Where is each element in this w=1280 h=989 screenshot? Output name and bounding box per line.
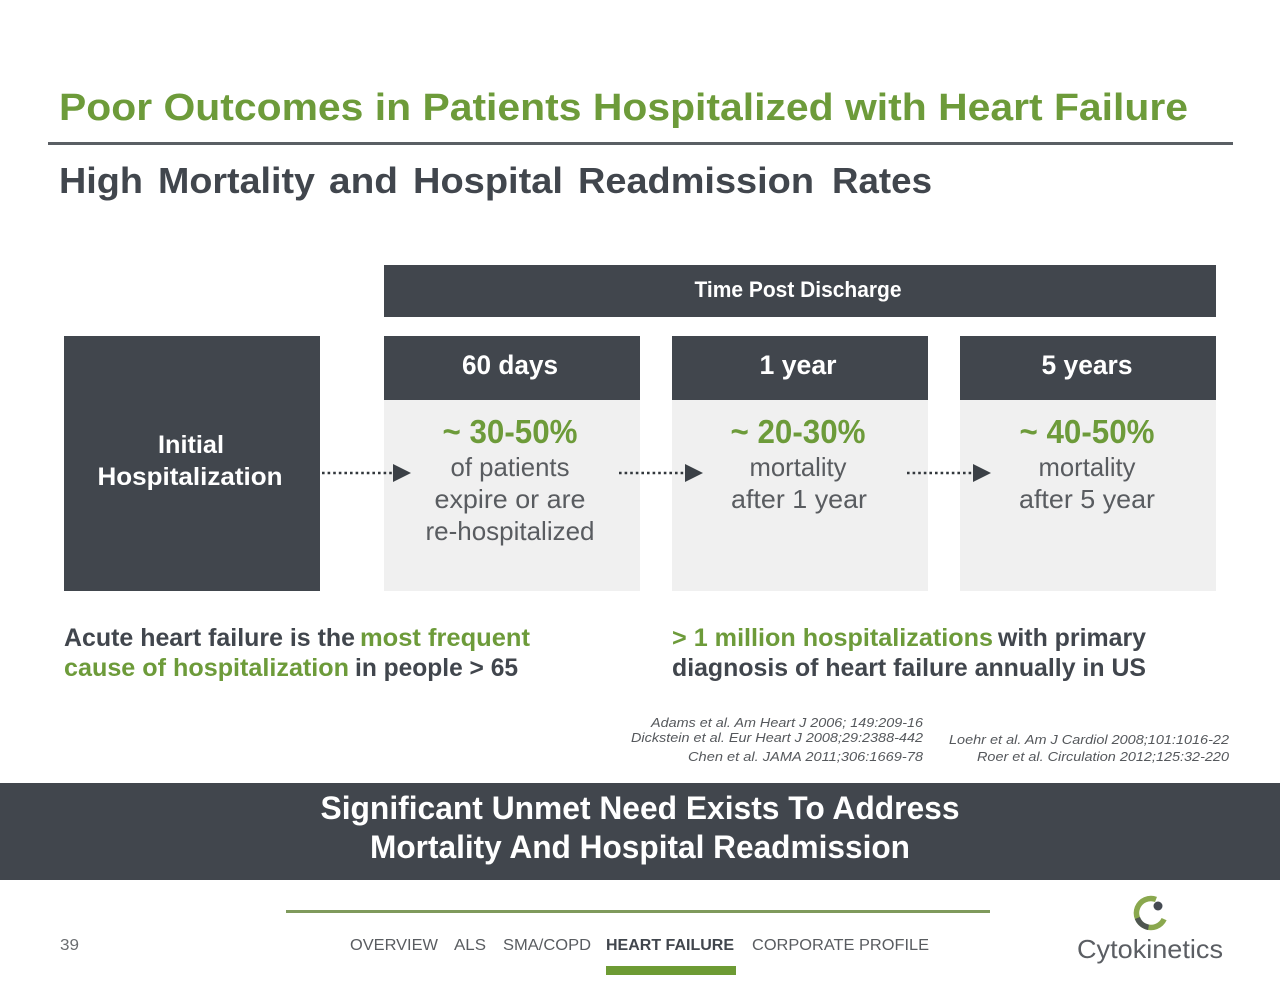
panel: 60 days: re-hospitalized [426, 516, 594, 546]
panel: 5 years: ~ 40-50% [1020, 413, 1154, 450]
banner: unmet need: Mortality And Hospital Readmission [370, 829, 910, 865]
text block: hospitalizations in US [672, 624, 1146, 682]
banner: unmet need: Significant Unmet Need Exists To Address [320, 790, 960, 826]
panel: 60 days: of patients [450, 452, 570, 482]
panel: 5 years: mortality [1038, 452, 1136, 482]
banner: unmet need [0, 783, 1280, 880]
panel: initial hospitalization: Hospitalization [98, 463, 282, 491]
references: left [631, 715, 924, 764]
arrow: 1 year to 5 years [907, 464, 991, 482]
arrow: 60 days to 1 year [619, 464, 703, 482]
subtitle: and [329, 160, 398, 201]
text block: most frequent cause: most frequent [360, 624, 531, 652]
panel: 1 year: ~ 20-30% [730, 413, 866, 450]
subtitle: Rates [832, 160, 932, 201]
logo: Cytokinetics [1077, 898, 1223, 964]
panel: 1 year [672, 336, 928, 591]
text block: most frequent cause [64, 624, 531, 682]
page number: 39 [60, 937, 79, 954]
subtitle: Hospital [413, 160, 563, 201]
subtitle: High [59, 160, 143, 201]
panel: 60 days [384, 336, 640, 591]
arrow: hospitalization to 60 days [322, 464, 411, 482]
panel: 60 days: ~ 30-50% [442, 413, 578, 450]
panel: 1 year: after 1 year [731, 484, 867, 514]
footer navigation [350, 937, 929, 975]
references: right: Roer et al. Circulation 2012;125:32-220 [977, 749, 1230, 764]
references: left: Chen et al. JAMA 2011;306:1669-78 [688, 749, 924, 764]
text block: hospitalizations in US: with primary [997, 624, 1146, 652]
panel: 1 year: 1 year [760, 350, 837, 380]
header: time post discharge [384, 265, 1216, 317]
footer navigation: OVERVIEW [350, 937, 439, 954]
panel: initial hospitalization: Initial [158, 431, 224, 459]
text block: hospitalizations in US: diagnosis of heart failure annually in US [672, 654, 1146, 682]
text block: hospitalizations in US: > 1 million hospitalizations [672, 624, 993, 652]
subtitle [59, 160, 932, 201]
subtitle: Mortality [158, 160, 315, 201]
footer navigation: HEART FAILURE [606, 937, 734, 954]
text block: most frequent cause: in people > 65 [355, 654, 518, 682]
subtitle: Readmission [578, 160, 814, 201]
panel: 5 years: 5 years [1042, 350, 1132, 380]
panel: initial hospitalization [64, 336, 320, 591]
text block: most frequent cause: Acute heart failure is the [64, 624, 355, 652]
title: Poor Outcomes in Patients Hospitalized with Heart Failure [59, 87, 1188, 129]
logo: Cytokinetics: Cytokinetics [1077, 934, 1223, 964]
footer navigation: ALS [454, 937, 486, 954]
panel: 5 years [960, 336, 1216, 591]
text block: most frequent cause: cause of hospitalization [64, 654, 349, 682]
panel: 60 days: expire or are [434, 484, 586, 514]
footer navigation: SMA/COPD [503, 937, 591, 954]
references: right: Loehr et al. Am J Cardiol 2008;101:1016-22 [949, 732, 1230, 747]
footer navigation: CORPORATE PROFILE [752, 937, 929, 954]
panel: 1 year: mortality [750, 452, 846, 482]
header: time post discharge: Time Post Discharge [694, 277, 902, 302]
references: left: Dickstein et al. Eur Heart J 2008;29:2388-442 [631, 730, 924, 745]
references: left: Adams et al. Am Heart J 2006; 149:209-16 [650, 715, 924, 730]
panel: 60 days: 60 days [462, 350, 558, 380]
panel: 5 years: after 5 year [1019, 484, 1155, 514]
references: right [949, 732, 1230, 764]
